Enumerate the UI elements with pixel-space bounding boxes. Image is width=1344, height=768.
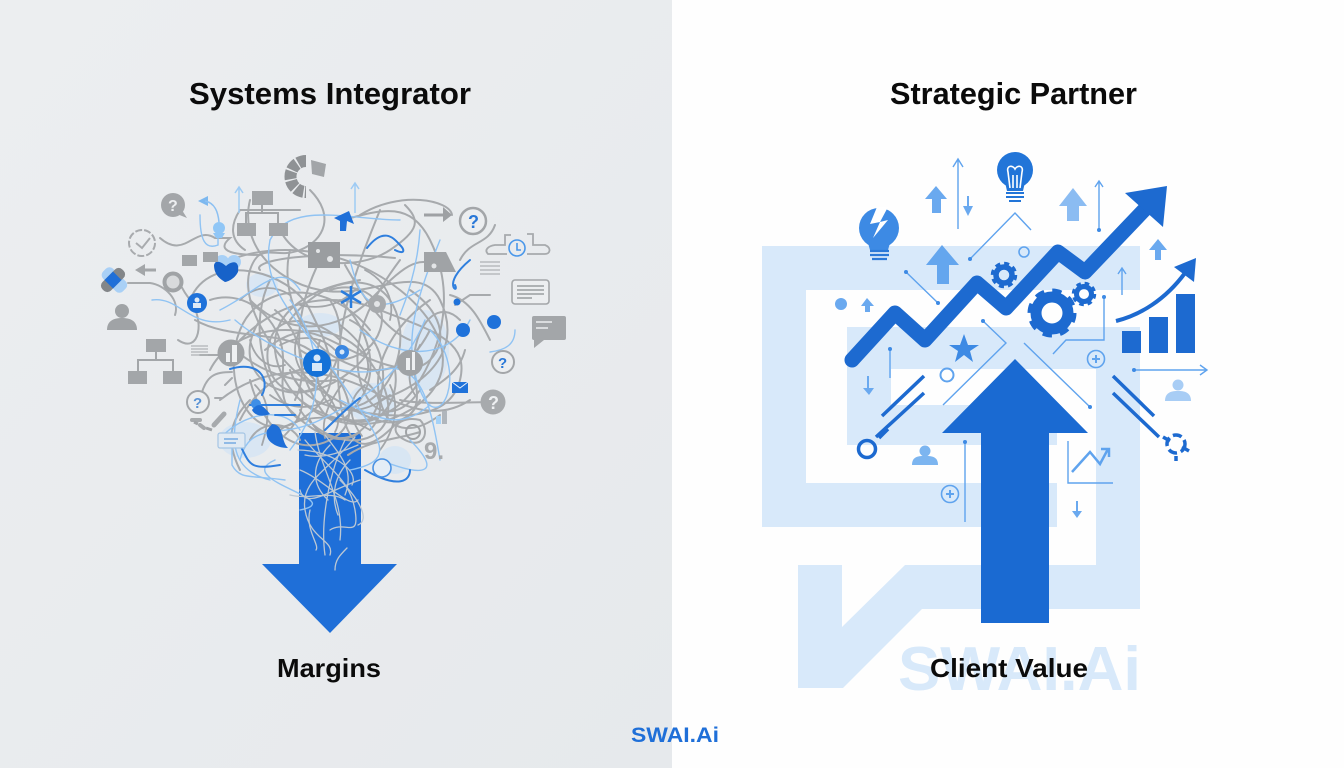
icon: grey nine glyph: 9. [424, 438, 444, 465]
icon: blue person circle centre [303, 349, 331, 377]
icon: question left: ? [193, 395, 202, 412]
icon: blue circles right [454, 298, 501, 337]
grey tangled lines [128, 190, 495, 470]
icon: list [191, 346, 208, 355]
icon: broken gear [290, 160, 326, 192]
thin lines over down arrow [290, 432, 363, 570]
icon: small gear [992, 264, 1016, 286]
icon: grey right arrow [424, 207, 452, 222]
label: Margins: Margins [277, 653, 381, 683]
icon: grey window [308, 242, 340, 268]
icon: question circle: ? [468, 212, 479, 232]
panel: strategic partner background [672, 0, 1344, 768]
heading: Strategic Partner: Strategic Partner [890, 76, 1137, 111]
icon: question bubble [161, 193, 187, 218]
tangled network of lines [128, 190, 515, 570]
icon: question circle [460, 208, 486, 234]
icon: grey window right [424, 252, 456, 272]
icon: grey ring [164, 274, 182, 290]
icon: timer right [486, 234, 550, 256]
icon: blue figure [251, 399, 270, 416]
icon: question left [187, 391, 209, 413]
icon: bandage cross [99, 265, 129, 295]
icon: broken gear right [1163, 435, 1189, 461]
icon: grey left arrow [135, 264, 156, 276]
icons: light up and down arrows [835, 186, 1167, 518]
icon: light persons [912, 380, 1191, 465]
icon: question right: ? [498, 355, 507, 372]
light blue tangled lines [152, 215, 515, 510]
icon: list right [480, 262, 500, 274]
icon: grey gear circle [368, 295, 386, 313]
icon: blue person circle left [187, 293, 207, 313]
icon: small blue circle [335, 345, 349, 359]
icon: blue up arrow [334, 211, 354, 231]
icon: light bulb [997, 152, 1033, 201]
soft light blue haze [219, 273, 449, 474]
label: Client Value: Client Value [930, 653, 1088, 683]
icon: small card [218, 433, 245, 448]
icon: small rings and plus [940, 247, 1104, 502]
icon: blue envelope [452, 382, 468, 393]
icon: small grey box [182, 252, 218, 266]
panel: systems integrator background [0, 0, 672, 768]
icon: org chart left [128, 339, 182, 384]
icon: small gear right [1074, 284, 1094, 304]
watermark: SWAI logo shape [762, 246, 1140, 688]
icon: solid question right: ? [488, 393, 499, 413]
icon: question bubble: ? [168, 198, 178, 215]
icon: blue hands [214, 255, 241, 282]
icon: solid question right [480, 390, 506, 414]
icon: curved arrow [198, 196, 219, 222]
icon: question right [492, 351, 514, 373]
icon: diagonal blue bars and ring [858, 376, 1159, 458]
icon: blue asterisk [341, 286, 361, 308]
connector end dots [888, 228, 1136, 444]
big down arrow: margins [262, 433, 397, 633]
icon: grey person [107, 304, 137, 330]
thin connector lines and arrows [890, 159, 1207, 522]
icon: grey stat circle right [397, 350, 423, 376]
watermark: SWAI.Ai text: SWAI.Ai [898, 635, 1141, 704]
icon: grey stat circle [218, 340, 244, 366]
icon: broken light bulb [859, 207, 899, 259]
icon: blue leaf [267, 424, 288, 448]
icon: org chart top [237, 191, 288, 236]
icon: star [949, 334, 979, 362]
extra dense grey strands in lower tangle [240, 270, 420, 450]
logo: SWAI.Ai: SWAI.Ai [631, 724, 719, 747]
icon: solid comment [532, 316, 566, 348]
big up arrow: client value [942, 359, 1088, 623]
mini bar chart with rising arrow [1116, 258, 1196, 353]
rising zigzag arrow [852, 186, 1167, 360]
heading: Systems Integrator: Systems Integrator [189, 76, 471, 111]
icon: light person [213, 222, 225, 238]
icons around the tangle [99, 160, 566, 477]
icon: grey loop and dashes [194, 422, 420, 439]
icon: thin up arrows [235, 183, 359, 213]
icon: clock [129, 230, 155, 256]
icon: small bars [436, 411, 447, 424]
icon: blue ring [373, 459, 391, 477]
icon: outlined comment [512, 280, 549, 304]
blue accent lines [230, 236, 470, 482]
icon: large gear [1030, 292, 1074, 334]
